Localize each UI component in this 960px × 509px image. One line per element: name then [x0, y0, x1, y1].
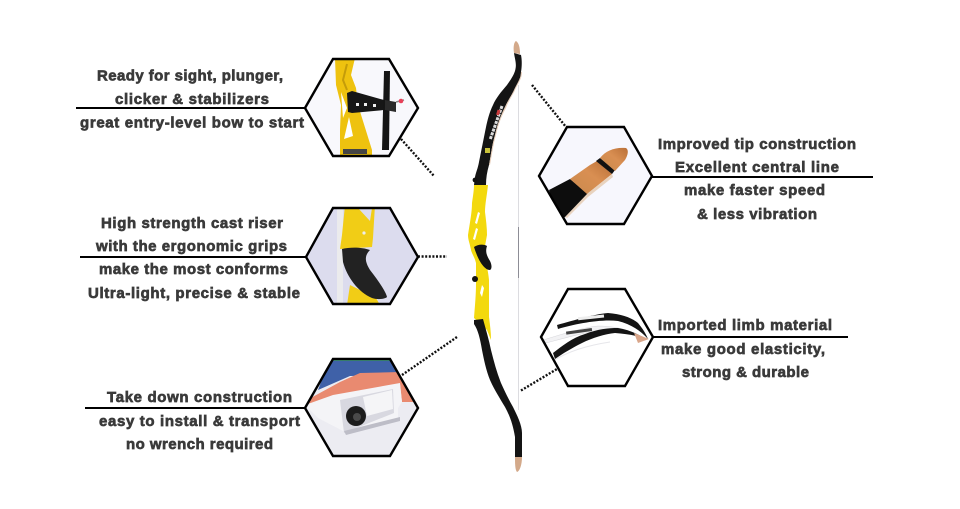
lower limb tip: [515, 457, 522, 472]
connector: tip to bow: [532, 85, 566, 127]
callout: riser text: [80, 215, 306, 302]
callout: riser text: make the most conforms: [99, 261, 288, 278]
limb logo: [485, 106, 502, 153]
hexagon: ergonomic grip: [300, 205, 420, 307]
riser button: [472, 276, 478, 282]
callout: tip text: [652, 136, 873, 223]
riser: [468, 185, 491, 340]
connector: limb to bow: [521, 369, 557, 390]
callout: riser text: Ultra-light, precise & stable: [88, 285, 300, 302]
callout: sight-ready text: great entry-level bow to start: [80, 114, 304, 132]
connector: sight to bow: [401, 139, 434, 176]
riser cut-outs: [473, 212, 484, 297]
connector: grip to bow: [418, 255, 447, 258]
callout: sight-ready text: clicker & stabilizers: [115, 91, 269, 108]
grip: [474, 245, 492, 270]
callout: riser text: with the ergonomic grips: [95, 238, 287, 255]
callout: tip text: Excellent central line: [675, 159, 839, 176]
hexagon: sight and riser: [300, 55, 420, 160]
callout: sight-ready text: [76, 68, 305, 132]
callout: tip text: make faster speed: [684, 182, 825, 199]
callout: sight-ready text: Ready for sight, plunger,: [97, 68, 283, 84]
callout: takedown text: easy to install & transport: [99, 413, 300, 430]
lower limb: [474, 319, 522, 457]
callout: limb material text: make good elasticity,: [661, 341, 825, 358]
callout: riser text: High strength cast riser: [101, 215, 283, 232]
callout: limb material text: Imported limb material: [658, 317, 832, 334]
hexagon: limb material: [537, 285, 657, 389]
callout: tip text: & less vibration: [697, 206, 817, 223]
recurve bow: [468, 41, 522, 472]
callout: limb material text: [653, 317, 848, 381]
bow string line: [518, 85, 520, 410]
callout: takedown text: [85, 389, 305, 453]
hexagon: takedown bolt: [300, 355, 420, 460]
hexagon: limb tip: [535, 125, 655, 227]
upper limb tip: [514, 41, 520, 54]
callout: tip text: Improved tip construction: [658, 136, 856, 153]
upper limb cream edge: [489, 72, 522, 165]
upper limb: [474, 53, 522, 185]
connector: takedown to bow: [402, 337, 457, 375]
callout: takedown text: Take down construction: [107, 389, 292, 406]
callout: limb material text: strong & durable: [682, 364, 809, 381]
callout: takedown text: no wrench required: [126, 436, 273, 453]
